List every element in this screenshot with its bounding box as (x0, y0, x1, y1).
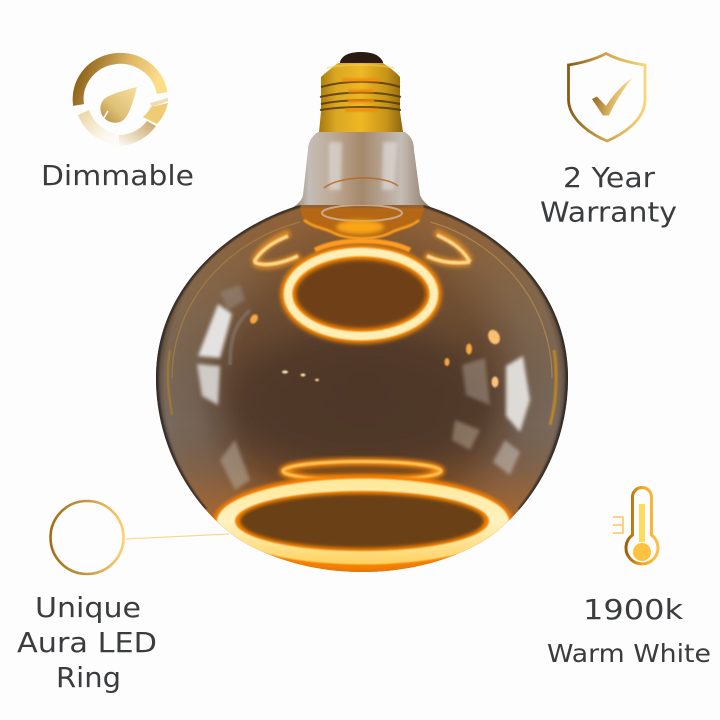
upper crescent reflection (254, 232, 470, 265)
icon: thermometer (613, 488, 658, 564)
light bulb (150, 52, 575, 575)
label: 1900k: 1900k (583, 593, 684, 626)
label: 2 Year Warranty: 2 Year (563, 161, 656, 194)
lower back ring reflection (283, 462, 441, 480)
icon: dimmable dial (78, 58, 168, 146)
heading: Dimmable: Dimmable (41, 159, 194, 192)
bulb contact tip (340, 52, 383, 66)
icon: LED ring marker (50, 501, 124, 574)
leader line to LED ring (126, 534, 229, 539)
lower LED ring (213, 474, 513, 570)
label: Unique Aura LED Ring: Ring (56, 661, 121, 694)
glass neck (292, 132, 432, 208)
window reflections (197, 285, 530, 490)
label: Warm White: Warm White (547, 639, 711, 668)
icon: warranty shield (568, 54, 645, 141)
label: Unique Aura LED Ring: Aura LED (17, 626, 157, 659)
socket reflection at top of globe (300, 205, 424, 238)
label: 2 Year Warranty (540, 161, 677, 228)
brass screw base (319, 63, 403, 132)
label: Unique Aura LED Ring: Unique (35, 591, 141, 624)
rim highlights (172, 222, 300, 378)
upper LED ring (288, 252, 434, 336)
label: 2 Year Warranty: Warranty (540, 196, 677, 228)
globe interior reflections (150, 200, 575, 575)
dark central reflection (232, 334, 489, 461)
glass globe (156, 205, 568, 572)
label: Unique Aura LED Ring (17, 591, 157, 694)
small light spots (248, 313, 502, 388)
dark rim of globe (156, 205, 568, 510)
